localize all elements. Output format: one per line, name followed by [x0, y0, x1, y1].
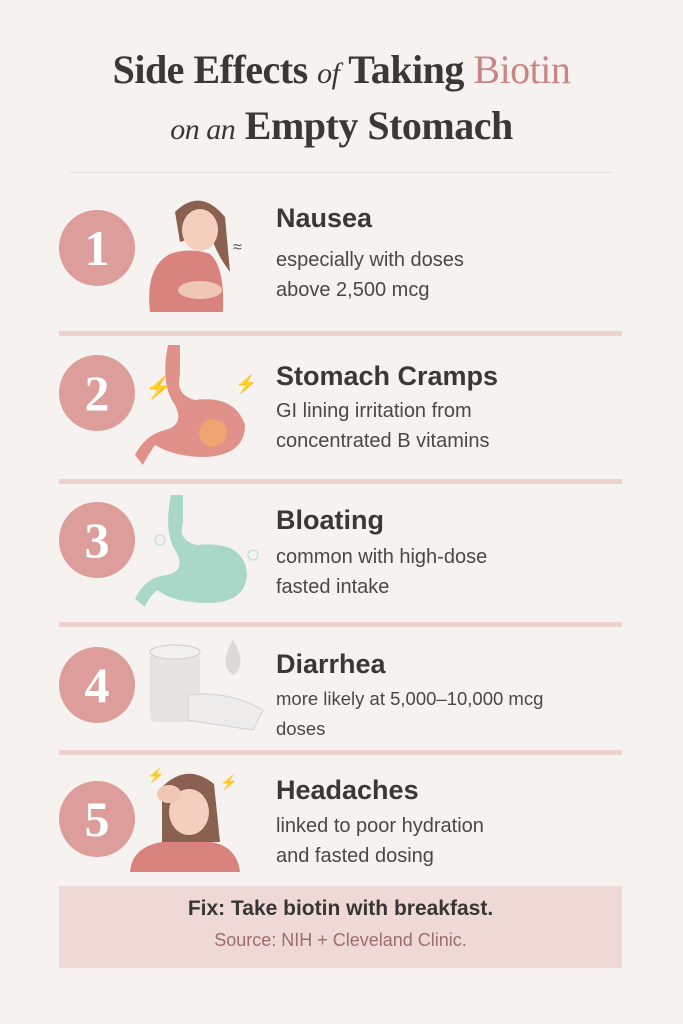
text: Stomach Cramps: GI lining irritation from — [276, 400, 472, 422]
number 4: 4 — [84, 657, 110, 713]
icon: stomach: ⚡ — [235, 373, 257, 395]
number 2: 2 — [84, 365, 110, 421]
number 4 — [59, 647, 135, 723]
text: Bloating: fasted intake — [276, 576, 389, 598]
text: Stomach Cramps: concentrated B vitamins — [276, 430, 489, 452]
text: Stomach Cramps — [276, 400, 489, 452]
footer callout: Fix: Take biotin with breakfast. — [188, 897, 493, 920]
number 1 — [59, 210, 135, 286]
text: Headaches — [276, 815, 484, 867]
number 3: 3 — [84, 512, 110, 568]
text: Headaches: linked to poor hydration — [276, 815, 484, 837]
icon: woman with headache: ⚡ — [147, 767, 164, 784]
icon: bloated stomach — [135, 495, 258, 607]
text: Nausea — [276, 249, 464, 301]
heading: Stomach Cramps: Stomach Cramps — [276, 361, 498, 391]
heading: Diarrhea: Diarrhea — [276, 649, 386, 679]
icon: woman with headache — [130, 767, 240, 872]
footer callout: Source: NIH + Cleveland Clinic. — [214, 930, 467, 950]
icon: stomach: ⚡ — [145, 375, 172, 401]
number 2 — [59, 355, 135, 431]
text: Bloating — [276, 546, 487, 598]
heading: Bloating: Bloating — [276, 505, 384, 535]
number 5 — [59, 781, 135, 857]
text: Diarrhea: doses — [276, 718, 325, 739]
text: Headaches: and fasted dosing — [276, 845, 434, 867]
text: Diarrhea — [276, 688, 543, 739]
text: Bloating: common with high-dose — [276, 546, 487, 568]
number 3 — [59, 502, 135, 578]
text: Nausea: above 2,500 mcg — [276, 279, 429, 301]
title: on an Empty Stomach — [170, 103, 513, 148]
text: Diarrhea: more likely at 5,000–10,000 mcg — [276, 688, 543, 709]
number 5: 5 — [84, 791, 110, 847]
icon: toilet paper and drop — [150, 640, 264, 730]
footer callout — [59, 886, 622, 968]
title — [113, 47, 570, 148]
icon: woman holding stomach: ≈ — [233, 239, 242, 256]
title: Side Effects of Taking Biotin — [113, 47, 570, 92]
text: Nausea: especially with doses — [276, 249, 464, 271]
icon: stomach — [135, 345, 257, 465]
heading: Nausea: Nausea — [276, 203, 372, 233]
icon: woman holding stomach — [149, 200, 242, 312]
heading: Headaches: Headaches — [276, 775, 419, 805]
number 1: 1 — [84, 220, 110, 276]
icon: woman with headache: ⚡ — [220, 774, 237, 791]
